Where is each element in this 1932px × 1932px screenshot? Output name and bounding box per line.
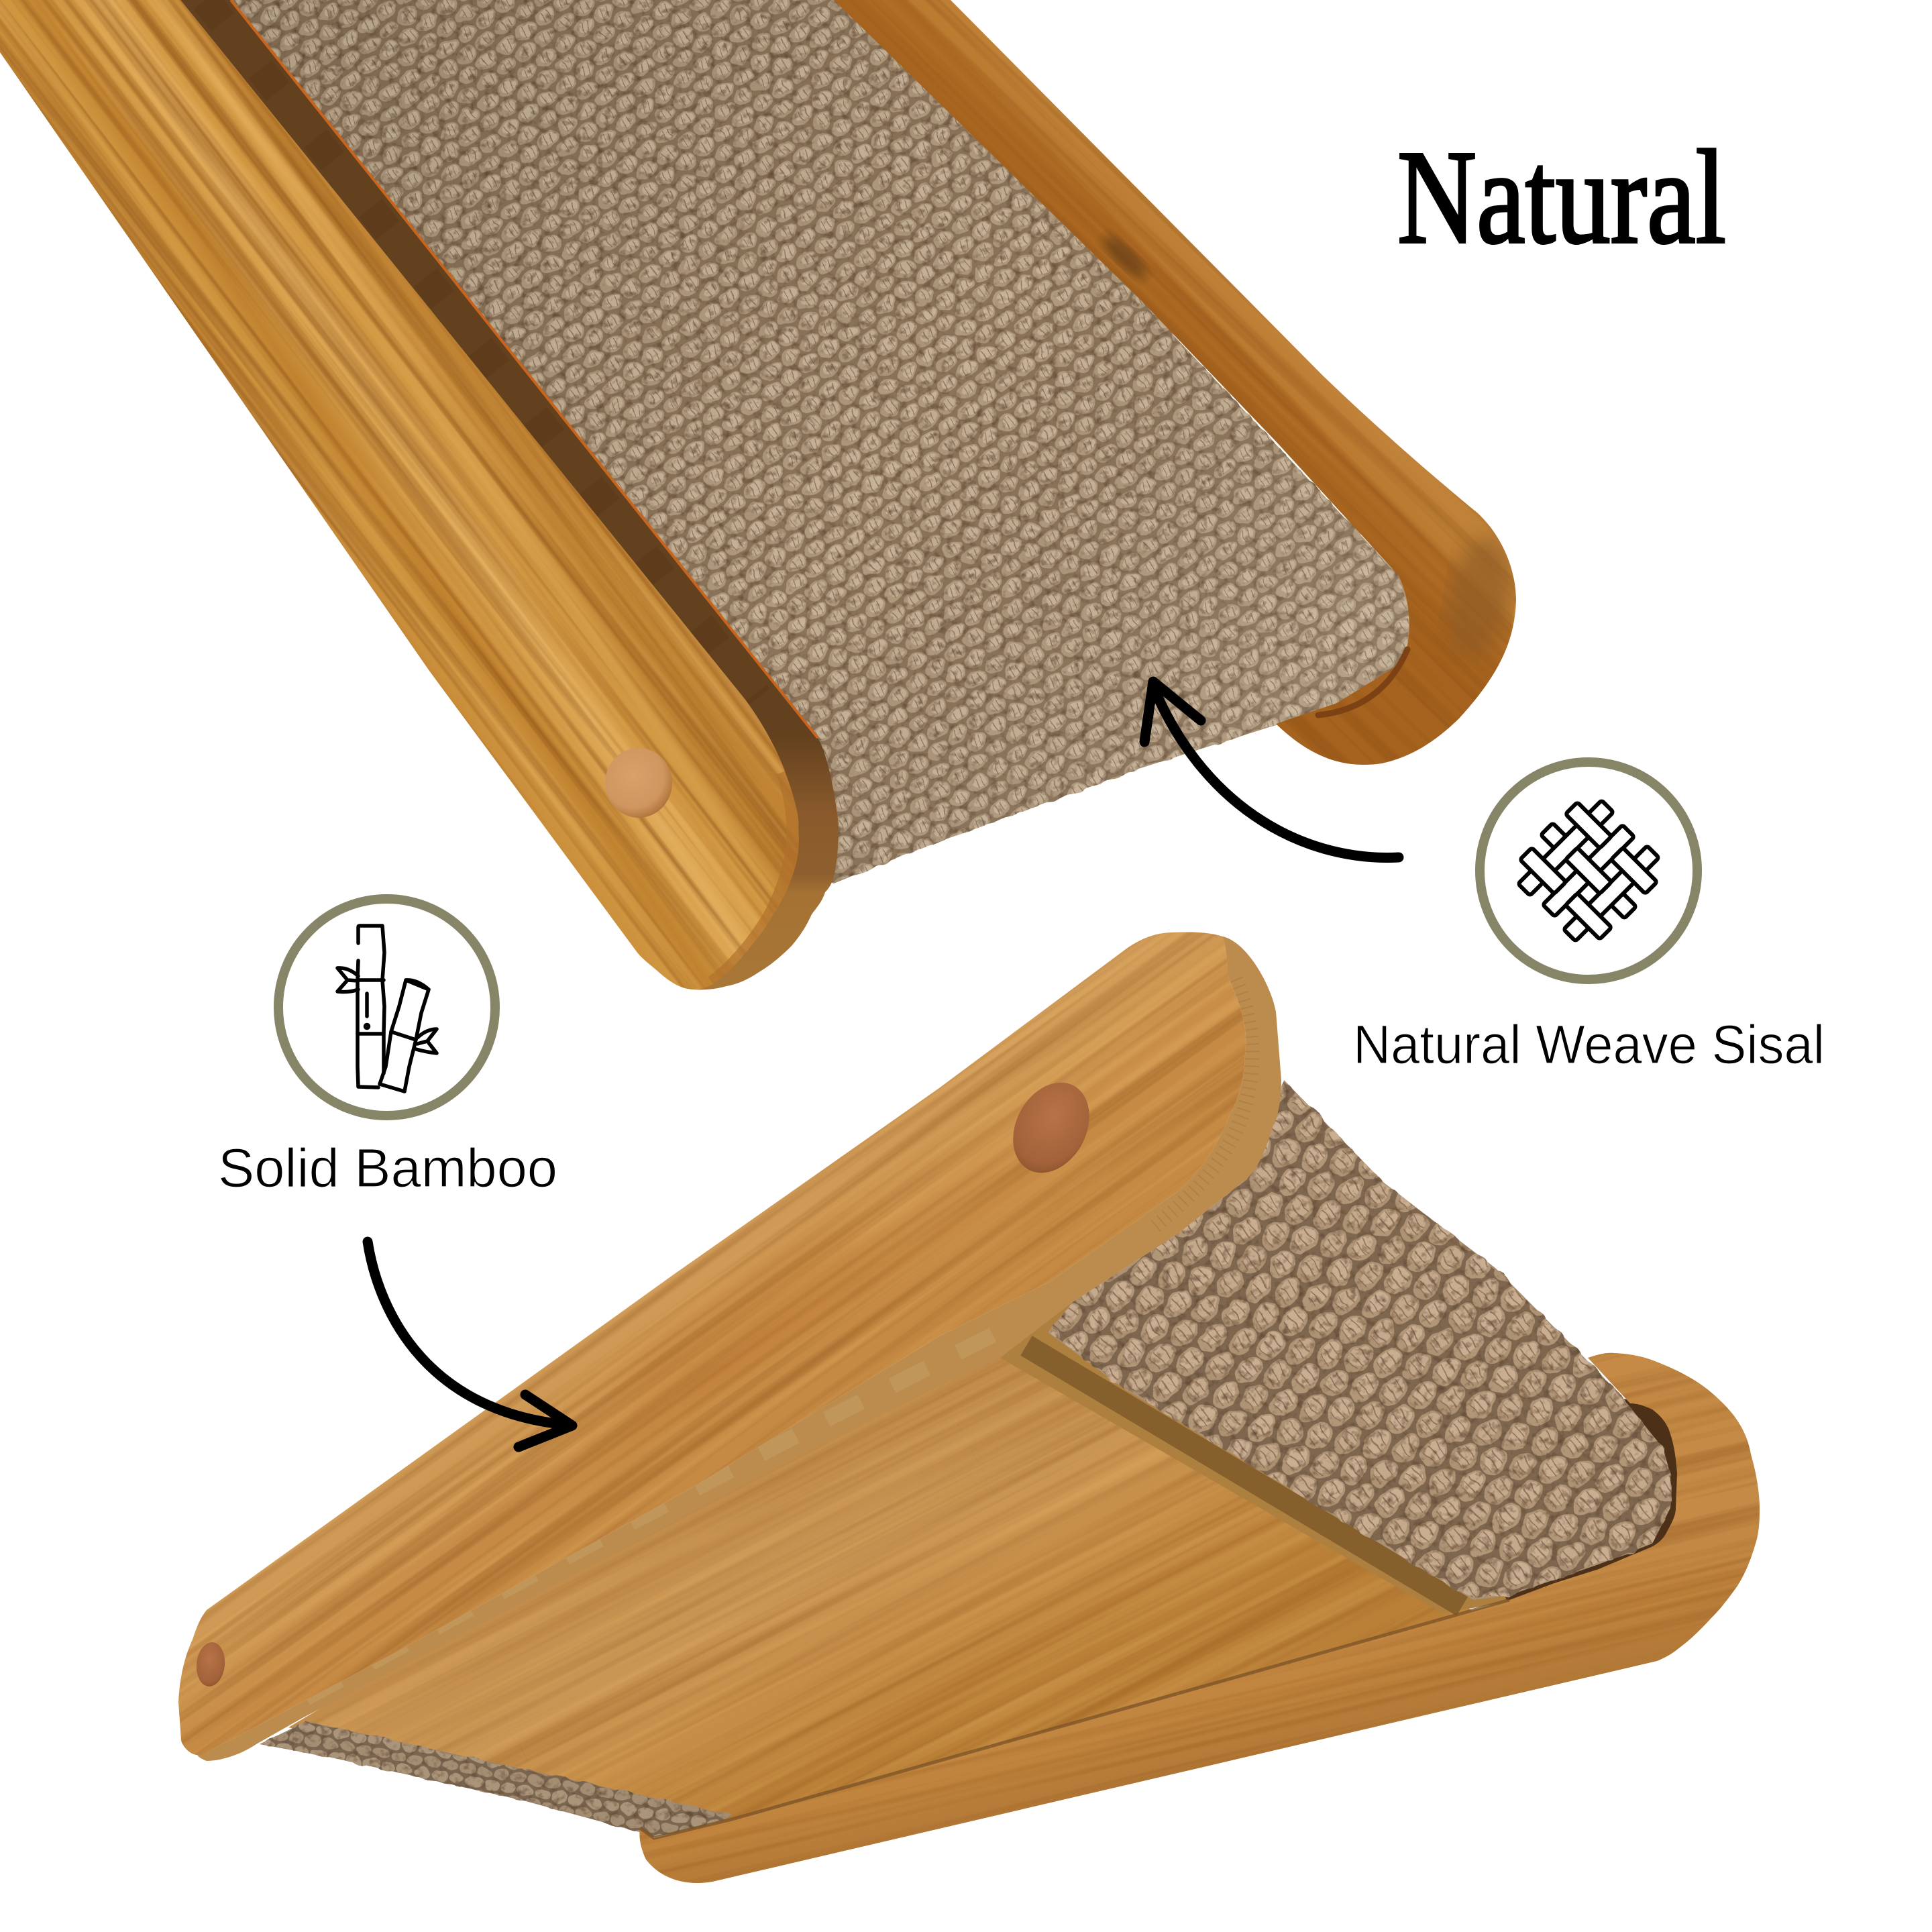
sisal roll end view <box>1048 1080 1672 1600</box>
sisal weave surface <box>174 0 1409 883</box>
end grain edge of upper rail <box>197 936 1281 1761</box>
label: Natural Weave Sisal <box>1353 1014 1825 1075</box>
title: Natural <box>1397 123 1726 272</box>
large peg <box>998 1069 1104 1186</box>
orange glue line <box>231 0 818 738</box>
small peg <box>195 1641 227 1688</box>
icon ring <box>1480 762 1697 979</box>
upper rail face <box>178 932 1246 1755</box>
cavity behind sisal roll <box>1476 1399 1690 1605</box>
arrow: to bamboo <box>368 1242 572 1447</box>
sisal strip under panel <box>260 1721 732 1836</box>
icon ring <box>278 899 495 1116</box>
icon: bamboo <box>337 926 437 1091</box>
wooden peg on left rail <box>605 748 672 818</box>
bottom product: underside view <box>178 932 1760 1883</box>
callout: natural weave sisal <box>1353 762 1825 1075</box>
label: Solid Bamboo <box>218 1138 557 1199</box>
arrow: to sisal <box>1144 682 1399 857</box>
left bamboo rail face <box>0 0 799 989</box>
lower bamboo rail <box>639 1352 1760 1883</box>
icon: weave <box>1505 788 1672 954</box>
channel beside sisal <box>1000 1295 1556 1613</box>
right bamboo rail <box>834 0 1516 765</box>
top product: bamboo and sisal scratcher <box>0 0 1516 990</box>
base panel <box>288 1356 1472 1823</box>
left dark bamboo edge <box>180 0 839 989</box>
callout: solid bamboo <box>218 899 557 1199</box>
